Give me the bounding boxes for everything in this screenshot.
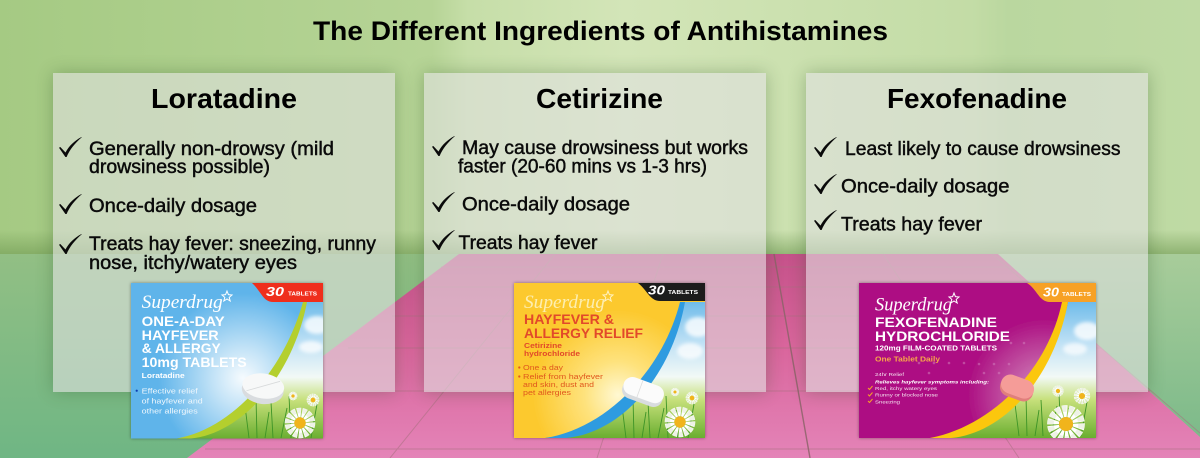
product benefits: One a day [523,365,564,372]
brand: Superdrug logo: Superdrug [875,295,952,316]
badge: 30 tablets [252,283,323,302]
icon: daisies [1051,386,1089,439]
brand: Superdrug logo: Superdrug [142,292,223,313]
product name: & ALLERGY [142,340,221,356]
product name: ALLERGY RELIEF [524,325,643,341]
list item: dosage: Once-daily dosage [89,196,257,217]
list item: hay fever: Treats hay fever [458,233,598,254]
badge: 30 tablets: TABLETS [668,290,698,296]
panel: Fexofenadine [806,73,1148,392]
product name: hydrochloride [524,349,580,358]
product name [142,313,247,380]
product benefits: and skin, dust and [523,382,594,389]
product name: 10mg TABLETS [142,354,247,370]
icon: daisies [668,389,697,434]
panel: Cetirizine [424,73,766,392]
symptom list [868,372,990,405]
title: The Different Ingredients of Antihistamines [313,16,888,46]
badge: 30 tablets: TABLETS [288,292,317,298]
product name: Cetirizine [524,341,562,350]
product benefits: Relief from hayfever [523,374,604,381]
scenery: sky, clouds and grass [177,302,330,438]
list item: dosage: Once-daily dosage [462,194,630,216]
product benefits: pet allergies [523,390,572,397]
list item: hay fever symptoms: nose, itchy/watery eyes [89,253,297,274]
product benefits [518,365,604,397]
badge: 30 tablets: 30 [1043,285,1060,300]
arc: blue swoosh [545,302,685,438]
badge: 30 tablets: 30 [266,284,285,299]
arc: green swoosh [177,302,307,438]
arc: yellow swoosh [930,302,1068,438]
badge: 30 tablets [638,282,705,301]
list item: non-drowsy: drowsiness possible) [89,157,270,178]
list item: hay fever symptoms [59,234,376,274]
list item: drowsiness: May cause drowsiness but works [462,138,748,159]
product name: HAYFEVER [142,327,219,343]
list item: hay fever symptoms: Treats hay fever: sneezing, runny [89,234,376,255]
heading: Loratadine: Loratadine [151,83,297,114]
product box: Cetirizine [514,282,711,438]
product benefits [136,389,203,415]
heading: Cetirizine: Cetirizine [536,83,663,114]
list item: hay fever [814,210,983,236]
product benefits: of hayfever and [142,399,203,406]
scenery: sky, clouds and grass [930,302,1100,438]
product name: FEXOFENADINE [875,314,997,330]
symptom list: 24hr Relief [875,372,905,378]
product benefits: other allergies [142,408,198,415]
icon: white capsule tablet [620,374,666,410]
list item: drowsiness: Least likely to cause drowsiness [845,139,1120,160]
decoration: dot pattern [918,342,1025,374]
badge: 30 tablets: TABLETS [1062,292,1091,298]
badge: 30 tablets [1027,283,1096,302]
badge: 30 tablets: 30 [648,282,666,298]
product name: 120mg FILM-COATED TABLETS [875,346,997,353]
product name [524,311,643,358]
scenery: sky, clouds and grass [545,302,711,438]
product box: Fexofenadine [859,283,1100,439]
symptom list: Red, itchy watery eyes [875,386,938,392]
list item: non-drowsy [59,137,334,178]
list item: hay fever: Treats hay fever [841,214,983,236]
brand: Superdrug logo: Superdrug [524,292,605,313]
icon: white tablet [240,371,286,407]
list item: dosage: Once-daily dosage [841,176,1010,198]
icon: pink tablet [997,372,1037,404]
list item: drowsiness [432,136,748,178]
symptom list: Relieves hayfever symptoms including: [875,379,990,385]
panel: Loratadine [53,73,395,392]
list item: drowsiness: faster (20-60 mins vs 1-3 hrs) [458,156,707,178]
product name: ONE-A-DAY [142,313,225,329]
product name [875,314,1010,353]
heading: Fexofenadine: Fexofenadine [887,83,1067,114]
product name: HAYFEVER & [524,311,614,327]
list item: non-drowsy: Generally non-drowsy (mild [89,139,334,160]
symptom list: Runny or blocked nose [875,392,938,398]
product name: HYDROCHLORIDE [875,328,1010,344]
icon: daisies [288,393,318,435]
product name: Loratadine [142,371,185,380]
product benefits: Effective relief [142,389,198,396]
dosage note: One Tablet Daily [875,355,941,364]
product box: Loratadine [131,283,330,438]
symptom list: Sneezing [875,399,900,405]
